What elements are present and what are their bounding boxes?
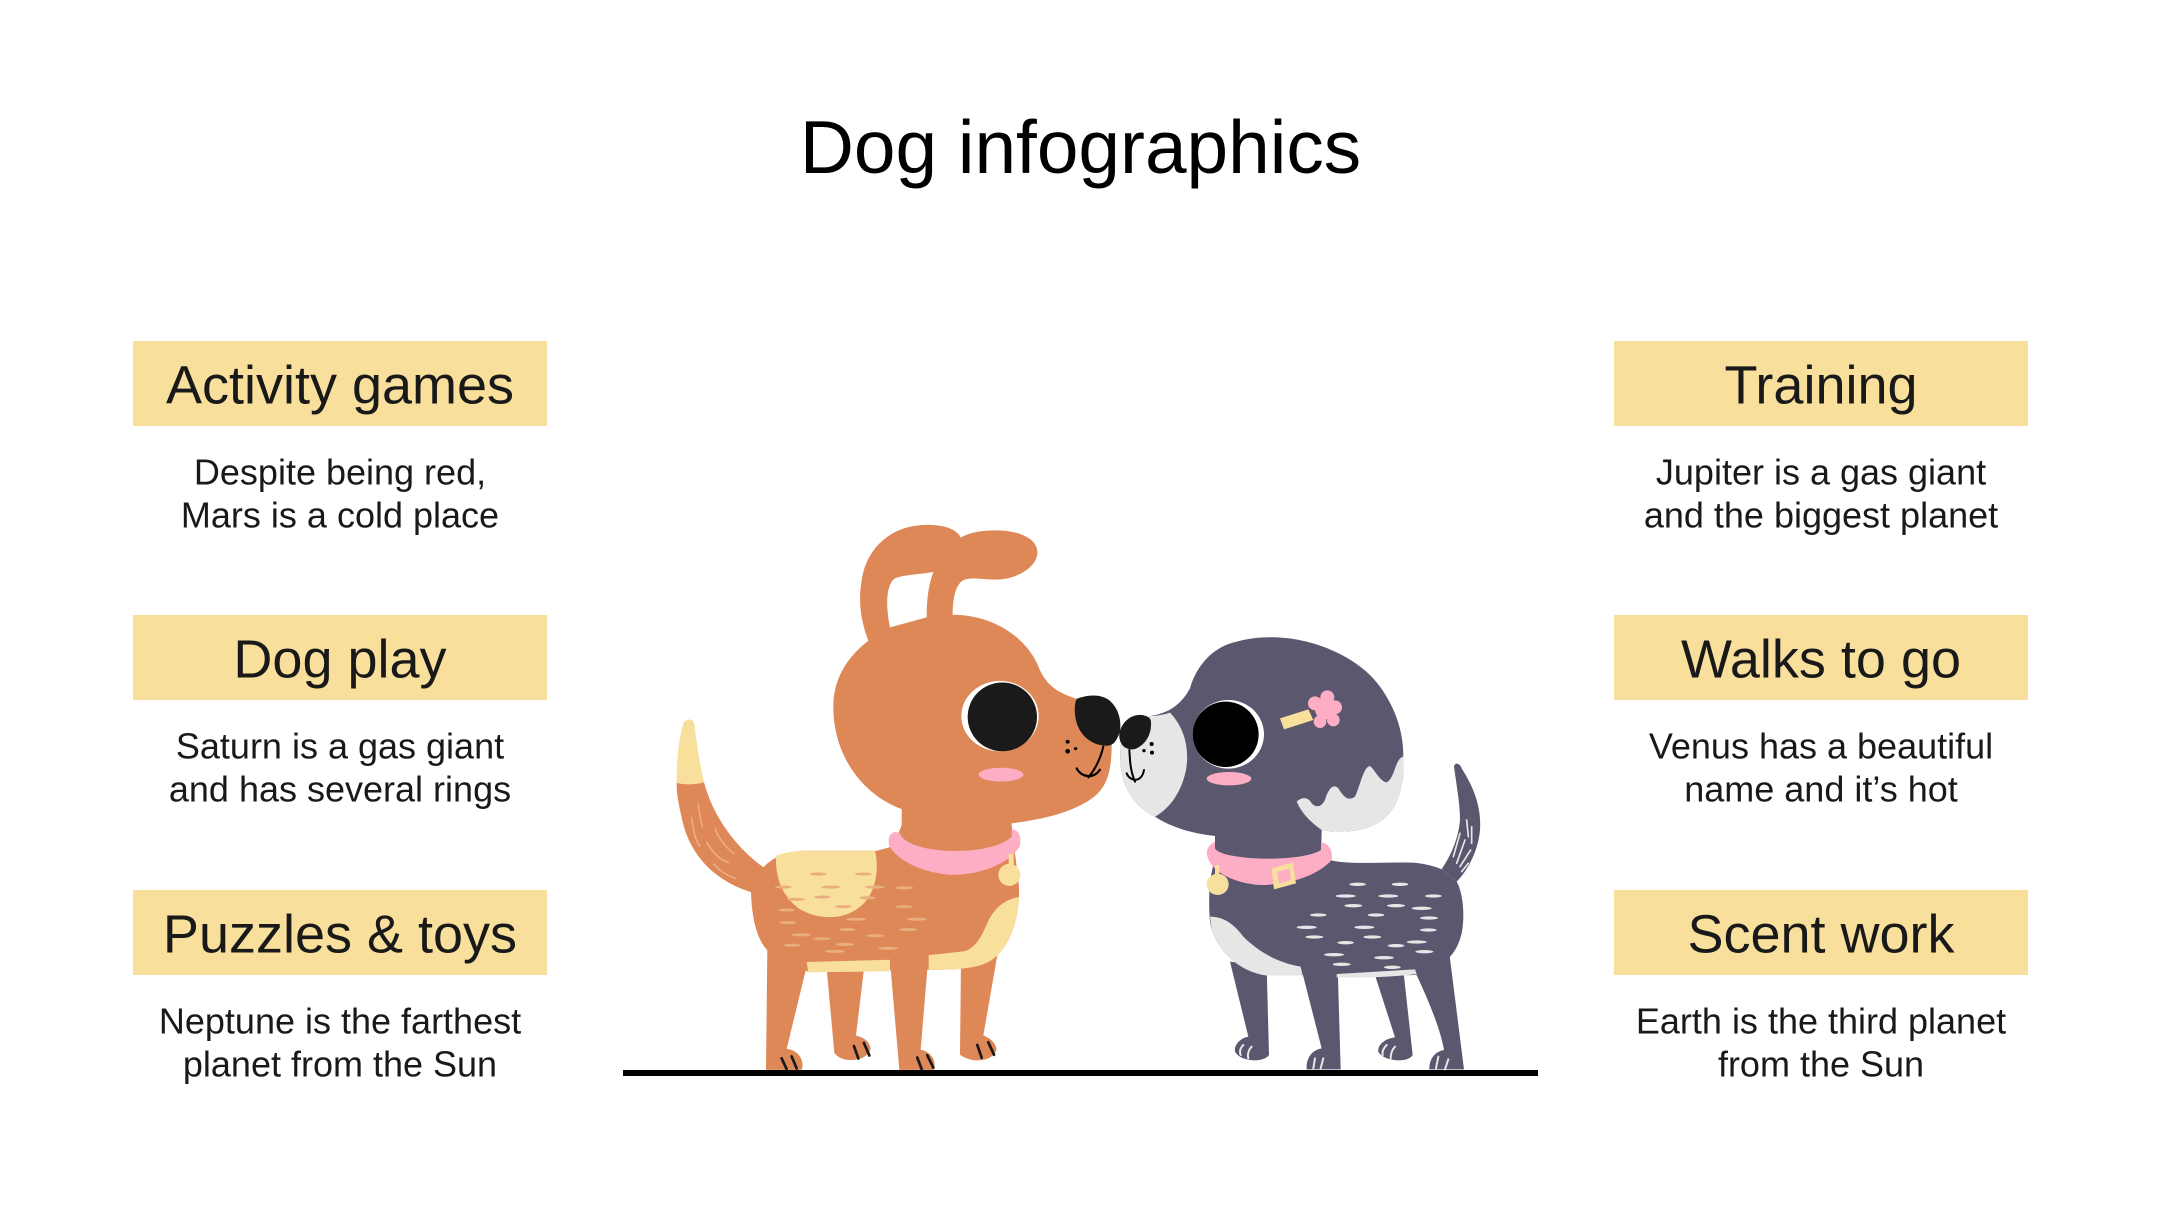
- panel: training: and the biggest planet: [1644, 494, 1998, 536]
- panel: activity games: [133, 341, 547, 536]
- icon: orange dog: [677, 525, 1120, 1070]
- panel: walks to go: [1614, 615, 2028, 810]
- panel: puzzles and toys: [133, 890, 547, 1084]
- panel: training: Training: [1724, 356, 1918, 416]
- panel: dog play: Saturn is a gas giant: [176, 726, 504, 766]
- panel: walks to go: Venus has a beautiful: [1649, 726, 1993, 766]
- panel: scent work: Scent work: [1687, 904, 1956, 964]
- panel: activity games: Activity games: [166, 356, 514, 416]
- panel: walks to go: Walks to go: [1681, 630, 1961, 690]
- panel: puzzles and toys: Puzzles & toys: [163, 904, 517, 964]
- panel: dog play: [133, 615, 547, 810]
- panel: training: Jupiter is a gas giant: [1656, 452, 1986, 492]
- panel: dog play: Dog play: [233, 630, 447, 690]
- icon: grey dog: [1119, 637, 1480, 1069]
- panel: dog play: and has several rings: [169, 768, 511, 810]
- ground line: [623, 1070, 1538, 1076]
- panel: scent work: [1614, 890, 2028, 1084]
- panel: activity games: Despite being red,: [194, 452, 486, 492]
- panel: activity games: Mars is a cold place: [181, 494, 499, 536]
- panel: puzzles and toys: planet from the Sun: [183, 1044, 497, 1084]
- panel: scent work: from the Sun: [1718, 1044, 1924, 1084]
- panel: walks to go: name and it’s hot: [1684, 768, 1958, 810]
- panel: puzzles and toys: Neptune is the farthest: [159, 1000, 521, 1042]
- panel: training: [1614, 341, 2028, 536]
- title: Dog infographics: [800, 105, 1361, 189]
- panel: scent work: Earth is the third planet: [1636, 1000, 2006, 1042]
